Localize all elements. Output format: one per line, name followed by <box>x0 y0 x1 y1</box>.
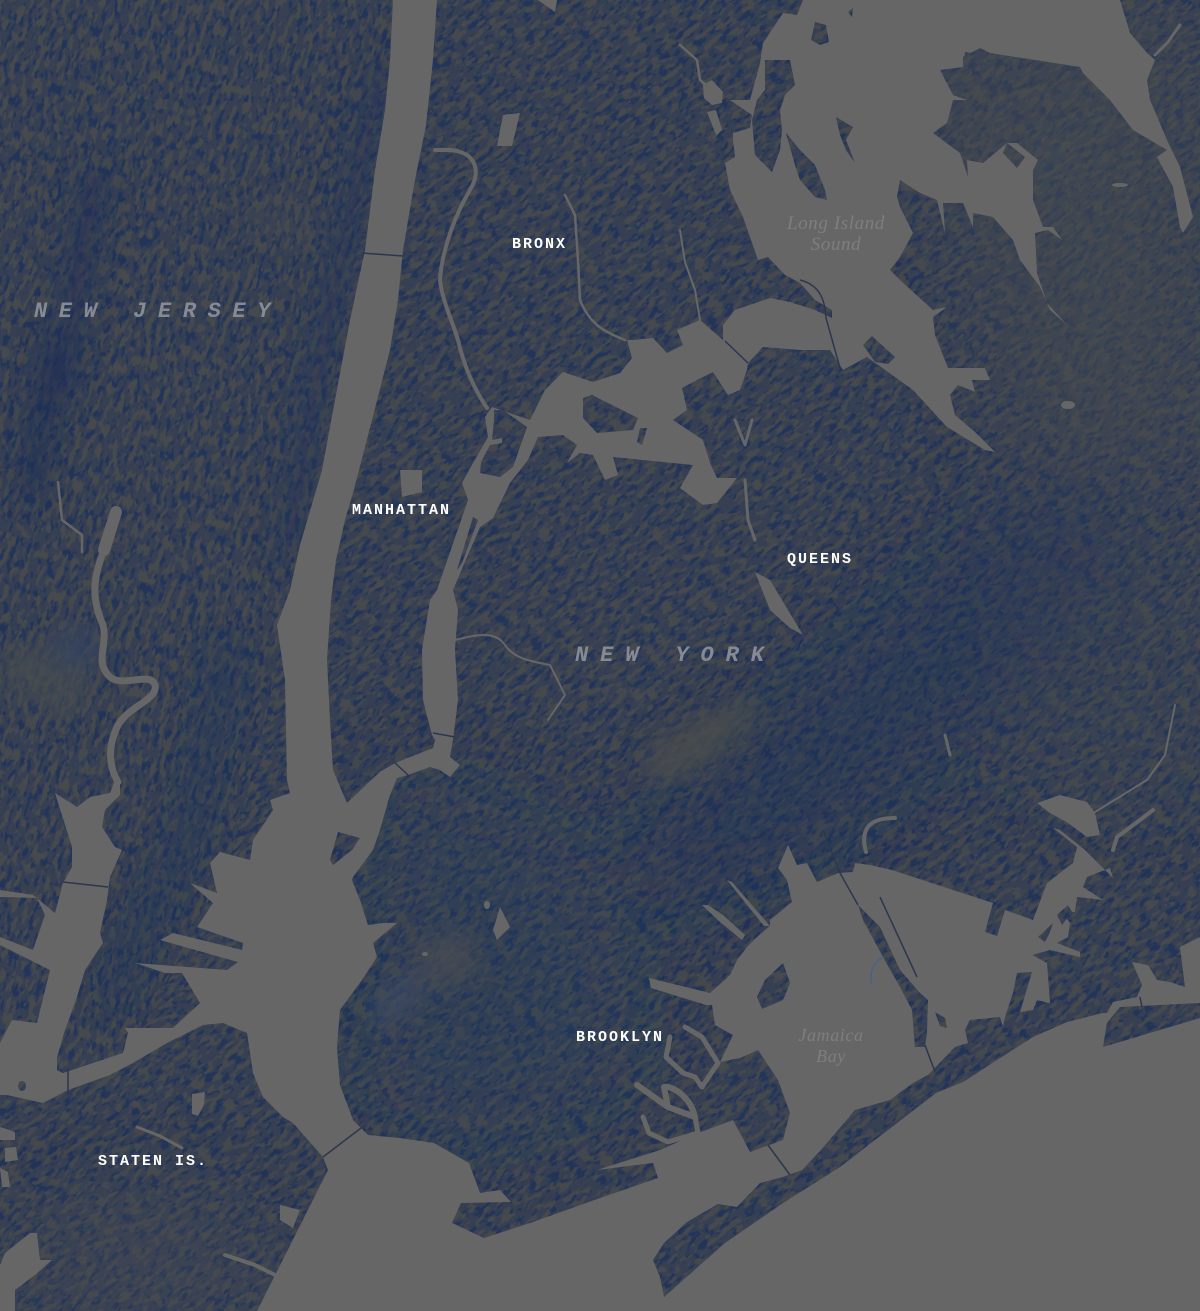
label: Queens: QUEENS <box>787 551 853 568</box>
terrain texture: New Jersey ridges <box>0 0 392 1095</box>
label: Staten Island: STATEN IS. <box>98 1153 208 1170</box>
label: Jamaica Bay: Bay <box>816 1046 846 1066</box>
label: Long Island Sound: Long Island <box>786 213 885 234</box>
label: Long Island Sound: Sound <box>811 234 861 255</box>
label: Bronx: BRONX <box>512 236 567 253</box>
label: Jamaica Bay: Jamaica <box>798 1025 864 1045</box>
label: Manhattan: MANHATTAN <box>352 502 451 519</box>
label: Brooklyn: BROOKLYN <box>576 1029 664 1046</box>
bridges <box>63 253 1142 1175</box>
label: New Jersey: NEW JERSEY <box>34 299 282 324</box>
label: New York: NEW YORK <box>575 643 776 668</box>
